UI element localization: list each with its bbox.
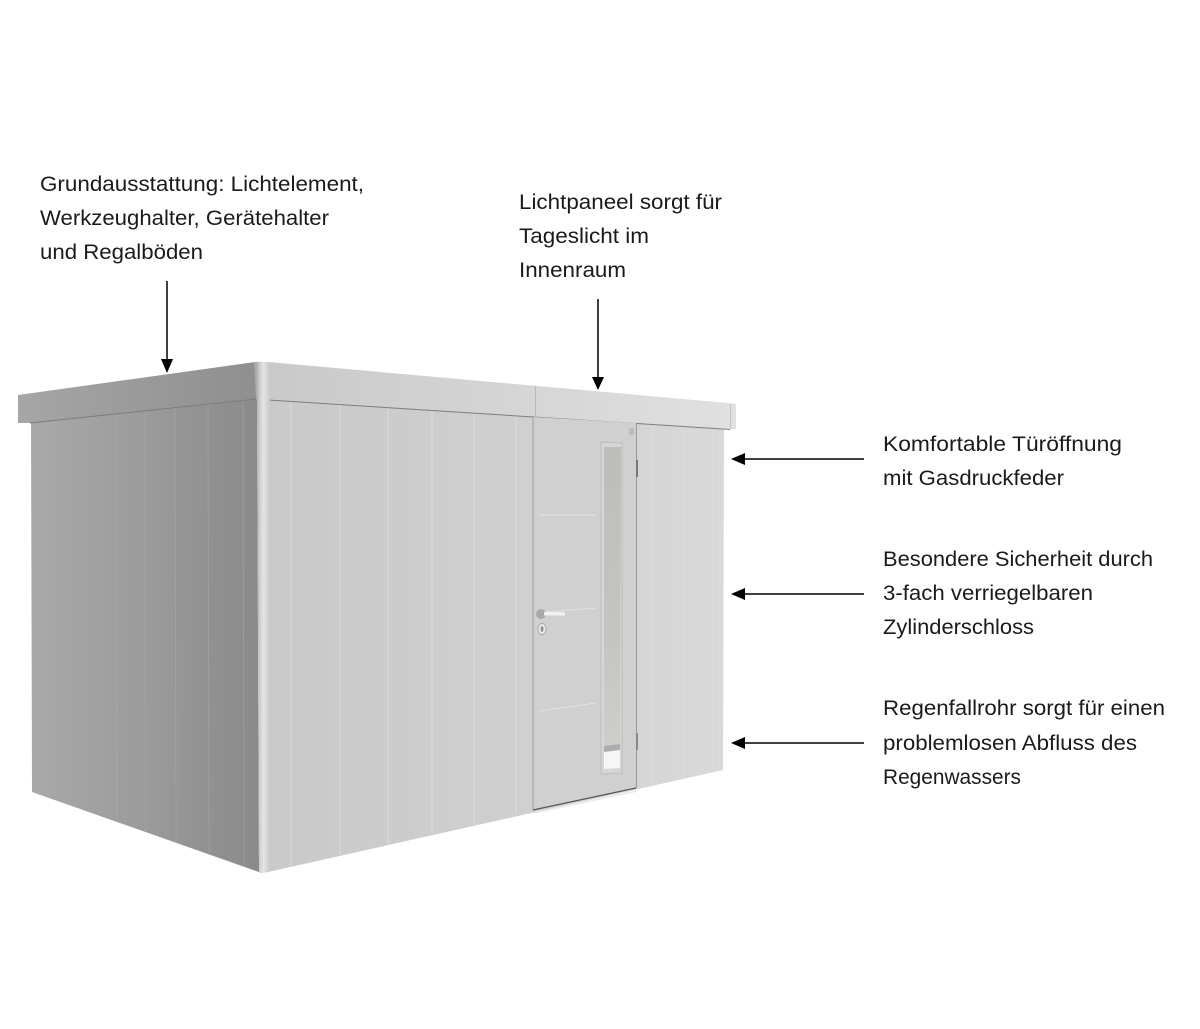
callout text: basic equipment: Werkzeughalter, Gerätehalter [40,206,329,230]
rounded corner post [257,399,270,873]
callout text: rain downpipe: Regenfallrohr sorgt für einen [883,696,1165,720]
callout text: light panel: Innenraum [519,258,626,282]
left side wall [31,399,259,872]
arrow: to roof left [161,281,173,373]
callout text: basic equipment [40,172,364,264]
callout text: security lock: 3-fach verriegelbaren [883,581,1093,605]
callout text: door opening: Komfortable Türöffnung [883,432,1122,456]
callout text: rain downpipe [883,696,1165,789]
arrow: to roof front [592,299,604,390]
callout text: basic equipment: Grundausstattung: Lichtelement, [40,172,364,196]
callout text: security lock: Besondere Sicherheit durch [883,547,1153,571]
callout text: light panel: Tageslicht im [519,224,649,248]
arrow: rain downpipe [731,737,864,749]
front roof fascia [268,362,736,430]
callout text: security lock [883,547,1153,639]
callout text: door opening [883,432,1122,490]
front wall [260,400,724,873]
callout text: rain downpipe: problemlosen Abfluss des [883,731,1137,755]
arrow: security lock [731,588,864,600]
left roof fascia [18,362,257,423]
callout text: security lock: Zylinderschloss [883,615,1034,639]
hinges [636,460,638,477]
callout text: light panel [519,190,722,282]
callout text: light panel: Lichtpaneel sorgt für [519,190,722,214]
callout text: basic equipment: und Regalböden [40,240,203,264]
door handle [536,609,565,634]
illustration: garden shed [18,362,736,873]
roof corner [254,362,270,401]
callout text: rain downpipe: Regenwassers [883,765,1021,789]
door window [601,442,622,774]
arrow: door opening [731,453,864,465]
callout text: door opening: mit Gasdruckfeder [883,466,1064,490]
door decor strips [539,515,596,711]
door badge [629,428,634,435]
door [533,417,638,814]
